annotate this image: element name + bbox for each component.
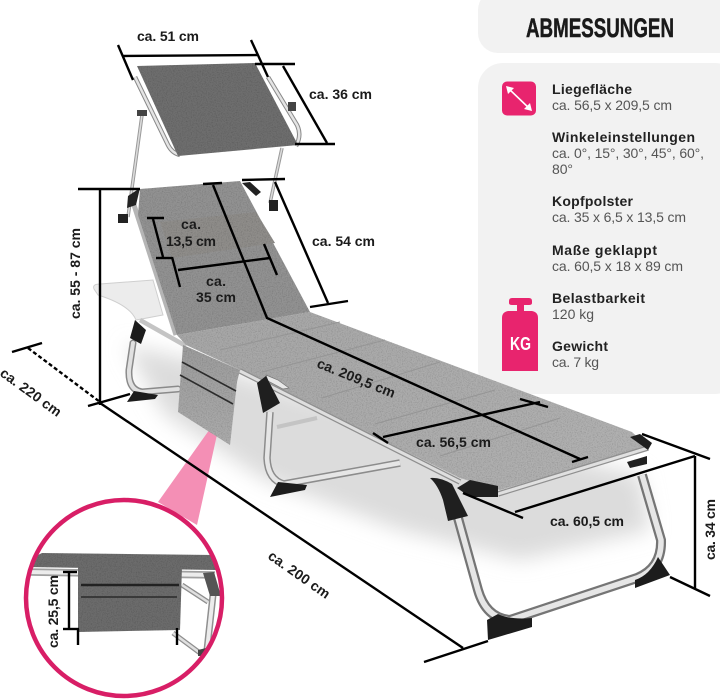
spec: Belastbarkeit	[552, 290, 645, 322]
dimension: 56,5 cm: ca. 56,5 cm	[416, 434, 491, 450]
dimension: 36 cm: ca. 36 cm	[309, 86, 372, 102]
side pocket	[178, 345, 240, 445]
head cushion	[160, 212, 275, 258]
icon: KG weight	[502, 298, 538, 371]
dimension: 200 cm: ca. 200 cm	[265, 547, 333, 602]
panel: heading background	[478, 0, 720, 53]
floor shadow	[125, 345, 650, 560]
seat side rail	[240, 371, 460, 482]
spec: Kopfpolster	[552, 193, 686, 225]
dimension: 220 cm	[0, 343, 100, 420]
dimension: 56,5 cm	[373, 399, 548, 450]
spec: Winkeleinstellungen: Winkeleinstellungen	[552, 129, 695, 145]
icon: diagonal size arrows	[502, 82, 536, 116]
front leg	[458, 475, 661, 620]
spec: Liegefläche: ca. 56,5 x 209,5 cm	[552, 97, 672, 113]
dimension: 209,5 cm: ca. 209,5 cm	[315, 355, 398, 401]
dimension: 13,5 cm: ca.	[181, 216, 201, 232]
lounger illustration	[94, 63, 670, 640]
dimension: 51 cm: ca. 51 cm	[137, 28, 199, 44]
spec: Belastbarkeit: Belastbarkeit	[552, 290, 645, 306]
spec: Winkeleinstellungen: 80°	[552, 161, 573, 177]
spec: Winkeleinstellungen: ca. 0°, 15°, 30°, 45°, 60°,	[552, 145, 704, 161]
backrest fabric	[138, 181, 310, 335]
backrest hinges and knobs	[118, 182, 278, 223]
backrest left rail	[134, 205, 176, 335]
sunshade knobs	[137, 102, 296, 116]
dimension: 54 cm: ca. 54 cm	[312, 233, 375, 249]
dimension: 25,5 cm: ca. 25,5 cm	[45, 575, 61, 648]
side clamp	[266, 375, 289, 389]
sunshade frame	[135, 77, 299, 155]
front brackets and corners	[430, 434, 652, 521]
spec: Maße geklappt: ca. 60,5 x 18 x 89 cm	[552, 258, 683, 274]
spec: Gewicht: Gewicht	[552, 338, 608, 354]
side bracket	[257, 376, 280, 413]
spec: Winkeleinstellungen	[552, 129, 704, 177]
sunshade fabric	[137, 63, 298, 156]
spec: Liegefläche: Liegefläche	[552, 81, 632, 97]
dimension: 25,5 cm	[45, 572, 177, 648]
dimension: 13,5 cm	[147, 216, 216, 258]
inset circle outline	[26, 500, 222, 696]
seat front rail	[498, 448, 648, 494]
dimension: 55 - 87 cm	[67, 189, 140, 406]
spec: Liegefläche	[552, 81, 672, 113]
spec: Kopfpolster: Kopfpolster	[552, 193, 634, 209]
far side rail	[140, 320, 186, 346]
dimension: 209,5 cm	[203, 183, 588, 462]
inset lounger photo	[26, 553, 221, 656]
dimension: 35 cm	[172, 244, 277, 305]
dimension: 51 cm	[118, 28, 268, 80]
seat fabric	[177, 312, 648, 490]
dimension: 36 cm	[255, 64, 372, 144]
dimension: 34 cm	[642, 434, 718, 596]
dimension: 34 cm: ca. 34 cm	[702, 499, 718, 560]
inset: pocket detail circle	[26, 500, 222, 696]
spec: Kopfpolster: ca. 35 x 6,5 x 13,5 cm	[552, 209, 686, 225]
front feet	[487, 557, 670, 640]
seat seams	[220, 322, 560, 456]
dimension: 54 cm	[242, 179, 375, 307]
inset pocket	[78, 566, 182, 632]
icon: KG weight: KG	[510, 334, 531, 354]
dimension: 200 cm	[100, 403, 488, 662]
spec: Belastbarkeit: 120 kg	[552, 306, 594, 322]
neighbouring light side plate	[94, 280, 163, 320]
dimension: 55 - 87 cm: ca. 55 - 87 cm	[67, 228, 83, 319]
dimension: 35 cm: ca.	[206, 273, 226, 289]
dimension: 60,5 cm: ca. 60,5 cm	[550, 513, 624, 529]
spec: Maße geklappt: Maße geklappt	[552, 242, 657, 258]
panel: specifications	[478, 63, 720, 394]
spec: Maße geklappt	[552, 242, 683, 274]
dimension: 60,5 cm	[463, 456, 695, 529]
pink magnifier wedge	[158, 412, 222, 525]
far leg	[127, 320, 178, 402]
spec: Gewicht: ca. 7 kg	[552, 354, 599, 370]
dimension: 13,5 cm: 13,5 cm	[166, 233, 216, 249]
back leg	[267, 412, 400, 497]
sunshade struts	[128, 115, 282, 217]
dimension: 35 cm: 35 cm	[196, 289, 236, 305]
spec: Gewicht	[552, 338, 608, 370]
